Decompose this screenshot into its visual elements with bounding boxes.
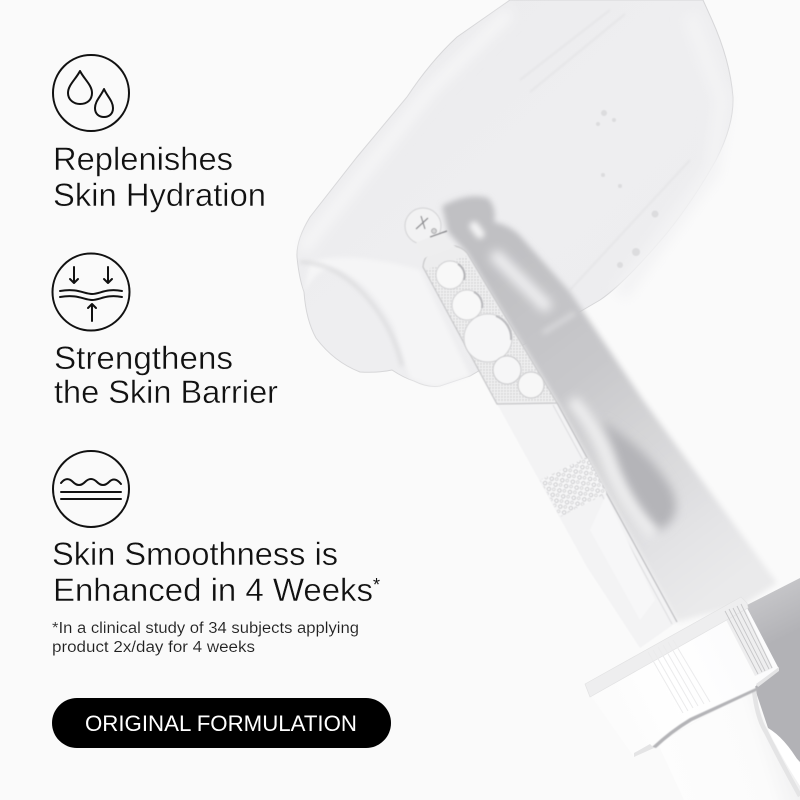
dropper bubble chamber [423, 246, 557, 404]
foam band [540, 457, 607, 517]
feature: hydration [53, 55, 266, 213]
cap side panel [722, 603, 773, 676]
icon: water drops [53, 55, 129, 131]
heading: smoothness: Skin Smoothness is [52, 536, 338, 572]
cap top rim [585, 597, 748, 697]
smear droplets [596, 110, 658, 268]
heading: skin barrier: Strengthens [54, 340, 233, 376]
heading: skin barrier [54, 340, 278, 410]
bottle body [658, 690, 800, 800]
dropper bulb tip [405, 208, 456, 258]
feature: skin barrier [52, 254, 278, 410]
cap body [590, 604, 779, 757]
footnote: *In a clinical study of 34 subjects applying [52, 620, 359, 637]
badge: original formulation: ORIGINAL FORMULATION [85, 711, 357, 736]
heading: skin barrier: the Skin Barrier [54, 374, 278, 410]
heading: hydration [53, 141, 266, 213]
bubbles [436, 261, 544, 398]
badge: original formulation [52, 698, 391, 748]
cap side ridges [725, 604, 772, 674]
icon: smooth skin layers [53, 451, 129, 527]
bottle strap [754, 690, 800, 796]
footnote: product 2x/day for 4 weeks [52, 639, 255, 656]
icon: barrier with arrows [52, 254, 130, 330]
footnote [52, 620, 359, 656]
cast shadow of dropper [442, 196, 777, 622]
feature: smoothness [52, 451, 380, 608]
heading: hydration: Replenishes [53, 141, 233, 177]
dropper lower stem [495, 400, 677, 648]
heading: smoothness: Enhanced in 4 Weeks [53, 572, 373, 608]
cap front ridges [648, 640, 710, 713]
dropper bottle and cap [585, 597, 800, 800]
heading: smoothness: * [373, 575, 380, 595]
serum smear [297, 0, 733, 386]
bright gap in bottle strap [768, 728, 800, 786]
glass dropper [405, 208, 677, 648]
heading: hydration: Skin Hydration [53, 177, 266, 213]
heading: smoothness [52, 536, 380, 608]
shadow of cap [745, 578, 800, 762]
cap lower lip [652, 687, 758, 748]
